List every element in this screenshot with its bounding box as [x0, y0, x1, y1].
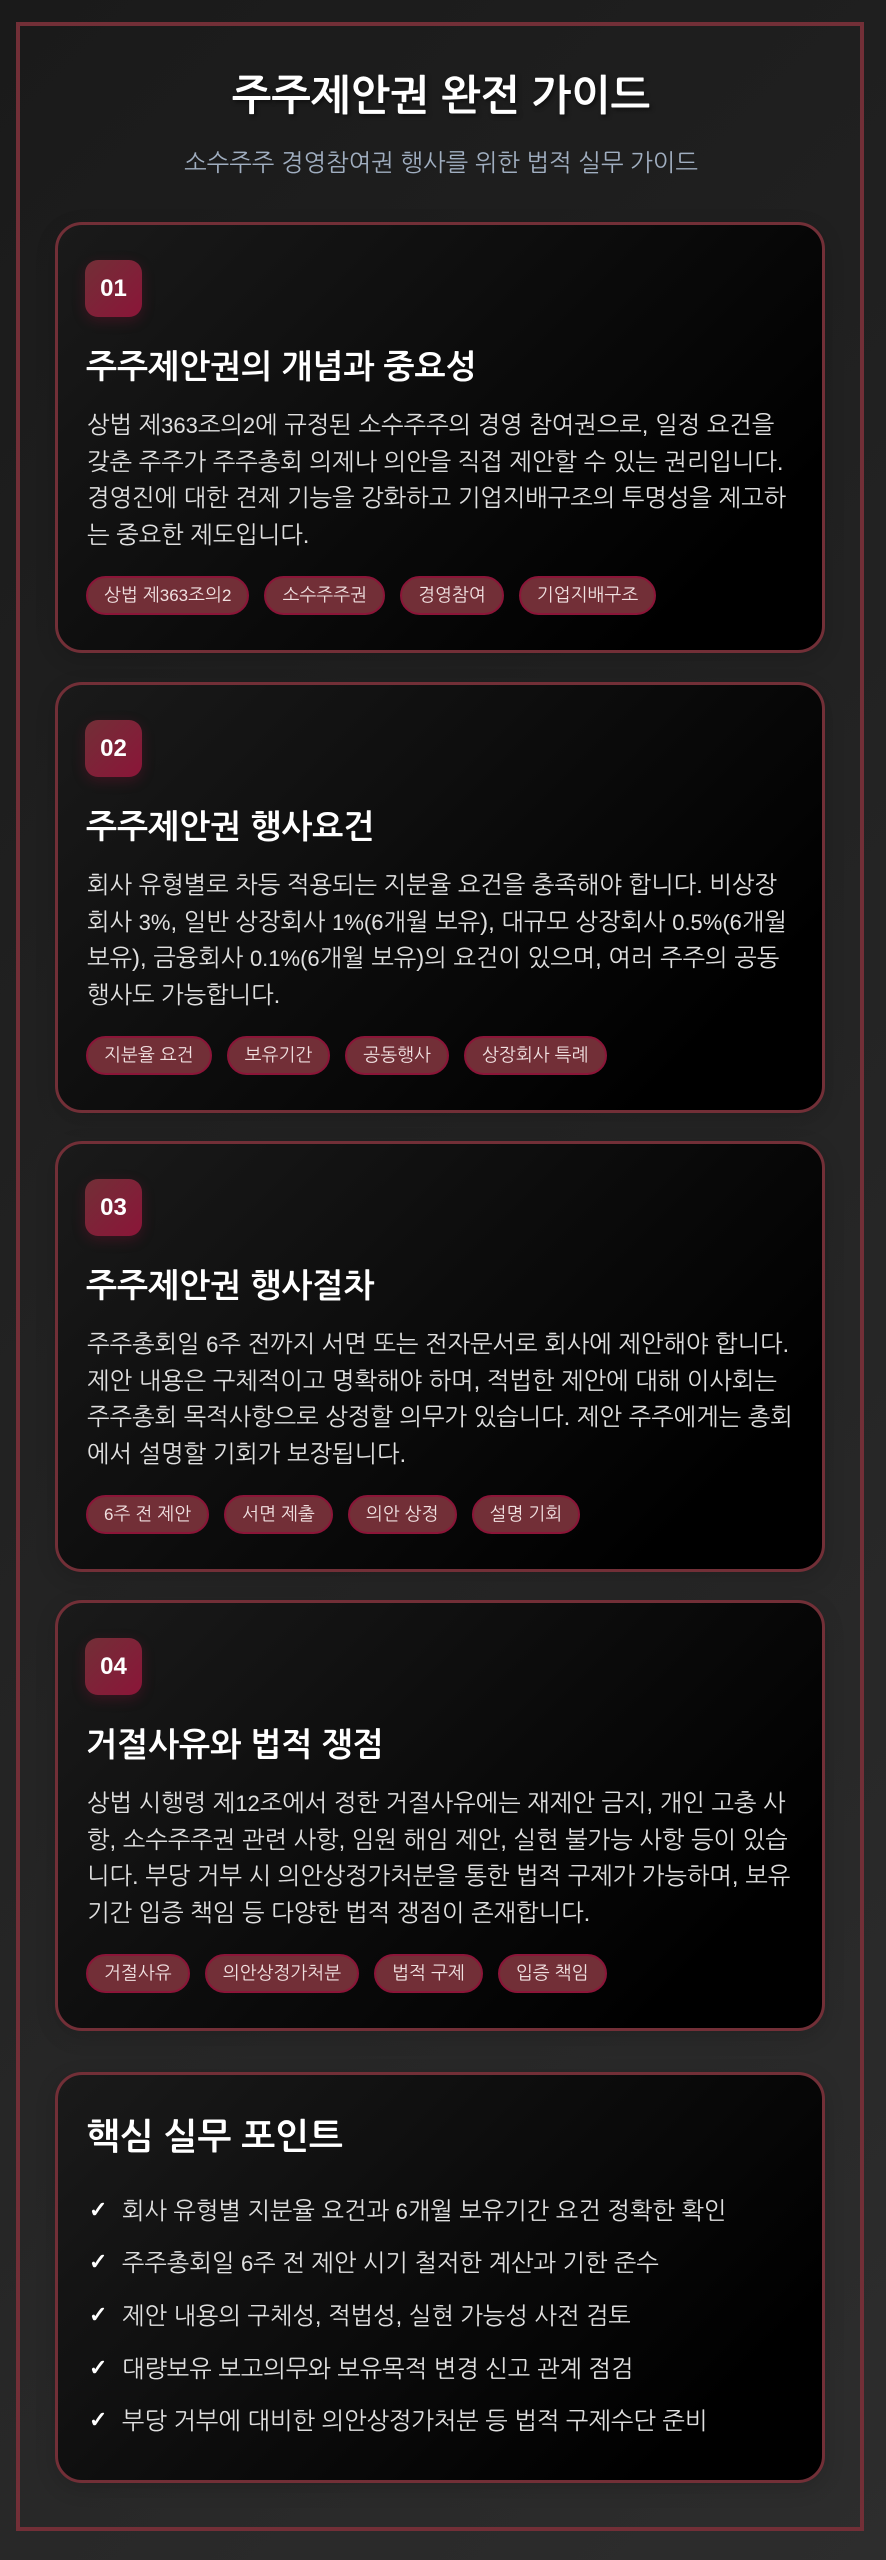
- tags 01: 경영참여: [418, 585, 486, 605]
- tags 04: [86, 1954, 607, 1993]
- body text 03: 에서 설명할 기회가 보장됩니다.: [87, 1441, 406, 1468]
- subtitle: 소수주주 경영참여권 행사를 위한 법적 실무 가이드: [184, 150, 698, 177]
- checklist item 2: ✓: [89, 2249, 107, 2274]
- checklist item 1: ✓: [89, 2197, 107, 2222]
- body text 03: 주주총회일 6주 전까지 서면 또는 전자문서로 회사에 제안해야 합니다.: [87, 1331, 789, 1358]
- panel: section 04: [55, 1600, 825, 2031]
- heading 01: 주주제안권의 개념과 중요성: [86, 348, 477, 385]
- badge 01: [85, 260, 142, 317]
- body text 01: 상법 제363조의2에 규정된 소수주주의 경영 참여권으로, 일정 요건을: [87, 412, 774, 439]
- panel: key practical points: [55, 2072, 825, 2483]
- body text 03: 제안 내용은 구체적이고 명확해야 하며, 적법한 제안에 대해 이사회는: [87, 1368, 777, 1394]
- tags 02: 공동행사: [363, 1045, 431, 1065]
- tags 03: 설명 기회: [490, 1504, 562, 1524]
- checklist item 2: 주주총회일 6주 전 제안 시기 철저한 계산과 기한 준수: [122, 2250, 659, 2277]
- panel: section 02: [55, 682, 825, 1113]
- body text 01: 경영진에 대한 견제 기능을 강화하고 기업지배구조의 투명성을 제고하: [87, 485, 786, 512]
- tags 02: 상장회사 특례: [482, 1045, 589, 1065]
- tags 01: 소수주주권: [282, 585, 367, 605]
- panel: section 03: [55, 1141, 825, 1572]
- tags 03: 의안 상정: [366, 1504, 439, 1524]
- badge 04: [85, 1638, 142, 1695]
- checklist item 5: 부당 거부에 대비한 의안상정가처분 등 법적 구제수단 준비: [122, 2408, 707, 2435]
- body text 02: 행사도 가능합니다.: [87, 982, 280, 1009]
- body text 03: [87, 1331, 793, 1468]
- body text 02: 회사 유형별로 차등 적용되는 지분율 요건을 충족해야 합니다. 비상장: [87, 872, 777, 899]
- body text 03: 주주총회 목적사항으로 상정할 의무가 있습니다. 제안 주주에게는 총회: [87, 1404, 793, 1431]
- checklist item 3: ✓: [89, 2302, 107, 2327]
- tags 01: 상법 제363조의2: [104, 585, 231, 605]
- title: 주주제안권 완전 가이드: [232, 72, 650, 119]
- checklist item 5: ✓: [89, 2407, 107, 2432]
- tags 03: [86, 1495, 580, 1534]
- body text 02: [87, 872, 787, 1009]
- badge 01: 01: [100, 275, 127, 302]
- body text 02: 보유), 금융회사 0.1%(6개월 보유)의 요건이 있으며, 여러 주주의 공동: [87, 945, 779, 972]
- tags 02: [86, 1036, 607, 1075]
- checklist item 3: 제안 내용의 구체성, 적법성, 실현 가능성 사전 검토: [122, 2303, 631, 2330]
- panel: section 01: [55, 222, 825, 653]
- heading 03: 주주제안권 행사절차: [86, 1267, 374, 1304]
- body text 02: 회사 3%, 일반 상장회사 1%(6개월 보유), 대규모 상장회사 0.5%(6개월: [87, 908, 787, 936]
- body text 01: 갖춘 주주가 주주총회 의제나 의안을 직접 제안할 수 있는 권리입니다.: [87, 448, 784, 476]
- tags 04: 의안상정가처분: [223, 1963, 341, 1983]
- body text 04: 항, 소수주주권 관련 사항, 임원 해임 제안, 실현 불가능 사항 등이 있습: [87, 1826, 788, 1854]
- badge 03: 03: [100, 1194, 127, 1221]
- badge 02: [85, 720, 142, 777]
- heading: key points: 핵심 실무 포인트: [86, 2116, 343, 2157]
- heading 02: 주주제안권 행사요건: [86, 808, 374, 845]
- tags 01: [86, 576, 656, 615]
- badge 03: [85, 1179, 142, 1236]
- tags 03: 서면 제출: [242, 1504, 315, 1524]
- body text 04: [87, 1790, 790, 1927]
- body text 04: 상법 시행령 제12조에서 정한 거절사유에는 재제안 금지, 개인 고충 사: [87, 1790, 786, 1817]
- tags 03: 6주 전 제안: [104, 1504, 191, 1524]
- tags 04: 거절사유: [104, 1963, 172, 1983]
- checklist item 4: ✓: [89, 2355, 107, 2380]
- body text 01: [87, 412, 786, 549]
- tags 01: 기업지배구조: [537, 585, 638, 605]
- body text 04: 기간 입증 책임 등 다양한 법적 쟁점이 존재합니다.: [87, 1900, 590, 1927]
- tags 04: 법적 구제: [392, 1963, 465, 1983]
- badge 04: 04: [100, 1653, 127, 1680]
- checklist item 1: 회사 유형별 지분율 요건과 6개월 보유기간 요건 정확한 확인: [122, 2198, 726, 2225]
- body text 04: 니다. 부당 거부 시 의안상정가처분을 통한 법적 구제가 가능하며, 보유: [87, 1863, 790, 1890]
- checklist item 4: 대량보유 보고의무와 보유목적 변경 신고 관계 점검: [122, 2356, 633, 2383]
- tags 04: 입증 책임: [516, 1963, 589, 1983]
- tags 02: 보유기간: [245, 1045, 312, 1065]
- heading 04: 거절사유와 법적 쟁점: [86, 1726, 384, 1763]
- badge 02: 02: [100, 735, 127, 762]
- tags 02: 지분율 요건: [104, 1045, 194, 1065]
- body text 01: 는 중요한 제도입니다.: [87, 522, 309, 549]
